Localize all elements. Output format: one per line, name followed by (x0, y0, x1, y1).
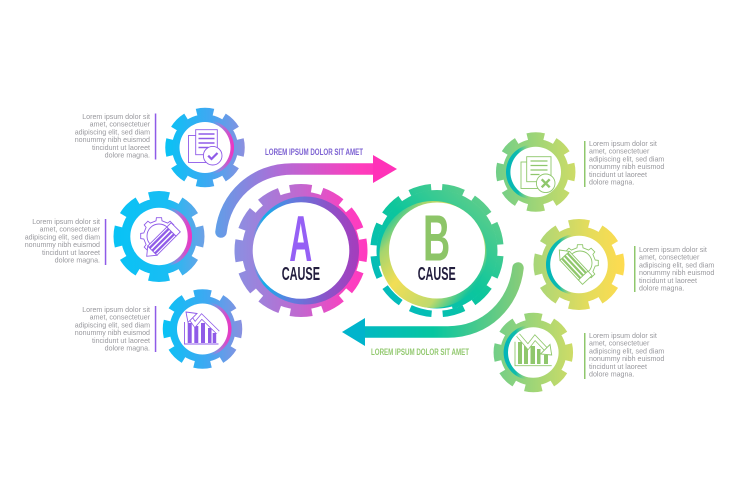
text: left top: tincidunt ut laoreet (92, 144, 150, 152)
text: left middle: dolore magna. (55, 256, 100, 264)
text: left top (75, 113, 151, 160)
divider: right bottom (584, 333, 586, 379)
gear: cause A: A (289, 202, 312, 275)
text: left middle: nonummy nibh euismod (25, 241, 100, 249)
text: left bottom (75, 306, 151, 352)
gear: document check (169, 112, 241, 184)
gear: cause A (238, 188, 364, 313)
text: left middle: amet, consectetuer (40, 226, 101, 234)
gear: pencil and cog (118, 195, 200, 278)
text: right bottom (589, 332, 664, 378)
text: left bottom: nonummy nibh euismod (75, 329, 150, 337)
divider: left top (155, 114, 156, 160)
label: cause A: CAUSE (282, 263, 320, 284)
gear: pencil and cog green (538, 223, 620, 306)
text: right bottom: amet, consectetuer (589, 340, 650, 348)
text: right top: tincidunt ut laoreet (589, 171, 647, 179)
text: right top: nonummy nibh euismod (589, 163, 664, 171)
arrow: A to B (221, 155, 397, 232)
divider: left middle (105, 219, 106, 265)
text: right middle: Lorem ipsum dolor sit (639, 246, 707, 254)
label: cause B: CAUSE (418, 263, 456, 284)
text: right middle: adipiscing elit, sed diam (639, 261, 714, 269)
divider: right middle (634, 246, 636, 292)
icon: pencil and cog (141, 218, 189, 270)
text: right top: adipiscing elit, sed diam (589, 155, 664, 163)
arrow: B to A (342, 268, 518, 346)
text: right middle (639, 246, 714, 292)
text: right top: dolore magna. (589, 178, 634, 186)
icon: rising chart (184, 312, 218, 344)
text: left middle: Lorem ipsum dolor sit (32, 218, 100, 226)
text: right top: Lorem ipsum dolor sit (589, 140, 657, 148)
text: right middle: dolore magna. (639, 284, 684, 292)
icon: document with check (188, 130, 222, 165)
text: left top: Lorem ipsum dolor sit (82, 113, 150, 121)
text: left middle (25, 218, 101, 264)
text: right bottom: tincidunt ut laoreet (589, 363, 647, 371)
text: right top (589, 140, 664, 186)
text: left middle: tincidunt ut laoreet (42, 249, 100, 257)
text: left bottom: Lorem ipsum dolor sit (82, 306, 150, 314)
text: right bottom: Lorem ipsum dolor sit (589, 332, 657, 340)
text: left bottom: tincidunt ut laoreet (92, 337, 150, 345)
icon: pencil and cog green (545, 245, 598, 293)
text: right middle: amet, consectetuer (639, 254, 700, 262)
text: left bottom: amet, consectetuer (90, 314, 151, 322)
text: right top: amet, consectetuer (589, 148, 650, 156)
gear: rising chart (166, 293, 238, 365)
gear: document cross (500, 136, 572, 208)
text: right middle: nonummy nibh euismod (639, 269, 714, 277)
text: left top: adipiscing elit, sed diam (75, 128, 150, 136)
text: left top: amet, consectetuer (90, 121, 151, 129)
text: right middle: tincidunt ut laoreet (639, 277, 697, 285)
text: left top: dolore magna. (105, 152, 150, 160)
heading: arrow A label: LOREM IPSUM DOLOR SIT AMET (265, 147, 363, 158)
gear: falling chart (497, 316, 569, 388)
icon: falling chart (515, 335, 552, 366)
text: right bottom: dolore magna. (589, 370, 634, 378)
heading: arrow B label: LOREM IPSUM DOLOR SIT AMET (371, 347, 469, 358)
text: right bottom: adipiscing elit, sed diam (589, 347, 664, 355)
icon: document with cross (521, 157, 555, 193)
letter B: B (423, 202, 450, 274)
text: left middle: adipiscing elit, sed diam (25, 233, 100, 241)
text: left top: nonummy nibh euismod (75, 136, 150, 144)
divider: right top (584, 141, 586, 187)
gear: cause B (374, 187, 500, 314)
text: left bottom: adipiscing elit, sed diam (75, 321, 150, 329)
divider: left bottom (155, 306, 156, 352)
text: left bottom: dolore magna. (105, 344, 150, 352)
text: right bottom: nonummy nibh euismod (589, 355, 664, 363)
